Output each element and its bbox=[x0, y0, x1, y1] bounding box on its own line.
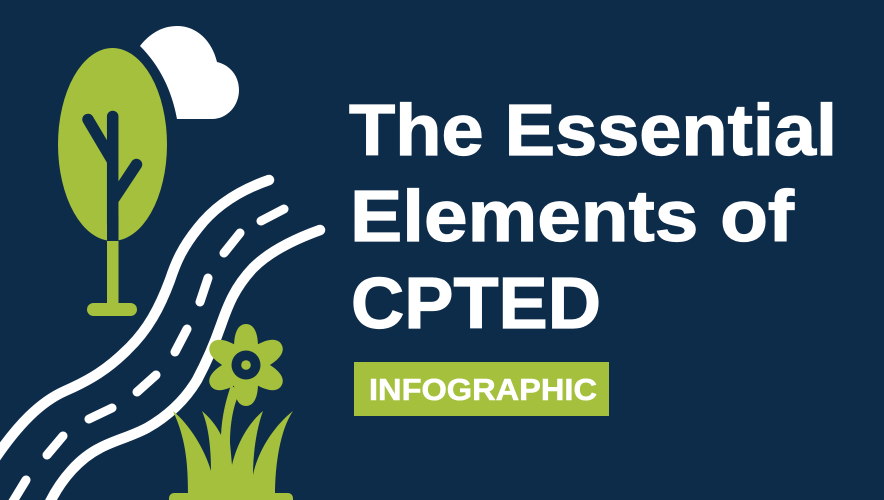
title: The Essential bbox=[349, 91, 837, 171]
icon: cloud bbox=[140, 26, 239, 119]
title bbox=[349, 91, 837, 344]
icon: winding road bbox=[0, 180, 320, 500]
badge: infographic: INFOGRAPHIC bbox=[369, 372, 597, 407]
badge: infographic bbox=[354, 362, 609, 416]
title: CPTED bbox=[351, 264, 601, 344]
icon: tree bbox=[58, 48, 167, 316]
title: Elements of bbox=[350, 177, 795, 257]
icon: grass and flower bbox=[169, 324, 293, 500]
